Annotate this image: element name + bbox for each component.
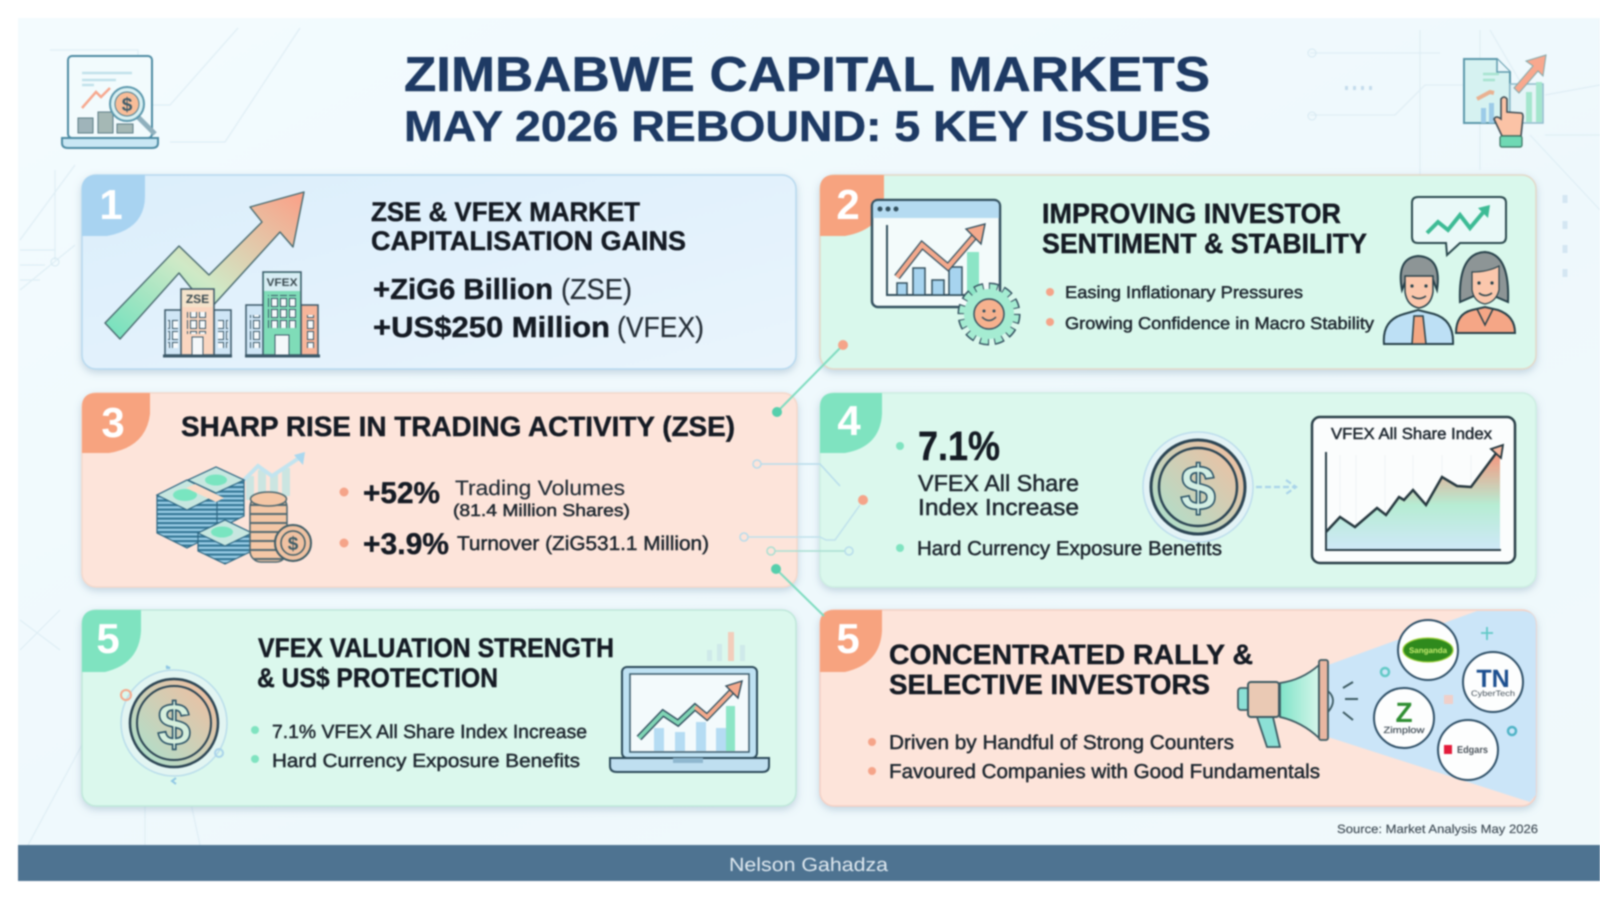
icon: VFEX building (245, 272, 320, 356)
figures: (ZSE) (561, 274, 632, 306)
company logo: TN CyberTech (1463, 652, 1523, 712)
company logo: green oval: Sanganda (1409, 646, 1448, 655)
footer bar: Nelson Gahadza (729, 855, 888, 876)
icon: dollar coin (1143, 432, 1253, 542)
number badge 4: 4 (837, 397, 861, 444)
number badge 1: 1 (99, 181, 123, 228)
arrow: coin to chart (1256, 480, 1296, 494)
stat: trading volumes (340, 477, 630, 520)
heading: VFEX VALUATION STRENGTH (258, 633, 614, 663)
figures: +ZiG6 Billion (373, 274, 553, 306)
connector circuit lines (740, 340, 868, 616)
panel 4: VFEX index increase (820, 393, 1536, 587)
stat: turnover: Turnover (ZiG531.1 Million) (457, 533, 709, 555)
company logo: Zimplow (1374, 688, 1434, 748)
heading: SENTIMENT & STABILITY (1042, 228, 1367, 259)
number badge 3: 3 (101, 399, 125, 446)
icon: male investor (1384, 256, 1453, 344)
heading (1042, 198, 1367, 259)
panel 3: trading activity (82, 393, 797, 587)
icon: rising arrow (105, 192, 304, 339)
title: ZIMBABWE CAPITAL MARKETS (404, 48, 1210, 102)
icon: female investor (1456, 252, 1515, 333)
figures (373, 274, 704, 344)
bullet list: Favoured Companies with Good Fundamentals (889, 761, 1320, 783)
stat: turnover: +3.9% (363, 528, 449, 561)
panel 5 right: concentrated rally (820, 610, 1536, 806)
number badge 5: 5 (836, 615, 860, 662)
icon: dollar coin with cycle arrows (121, 666, 227, 784)
heading: SHARP RISE IN TRADING ACTIVITY (ZSE) (181, 411, 735, 442)
icon: money stacks and coins: $ (288, 534, 299, 555)
number badge 2 (820, 175, 884, 236)
icon: browser chart window (872, 200, 1000, 307)
panel 2: investor sentiment (820, 175, 1536, 369)
icon: megaphone (1238, 660, 1358, 747)
heading (257, 633, 614, 693)
chart: VFEX All Share Index (1312, 417, 1515, 563)
icon: speech bubble with chart (1412, 197, 1506, 255)
title: MAY 2026 REBOUND: 5 KEY ISSUES (404, 103, 1211, 151)
bullet list: 7.1% VFEX All Share Index Increase (272, 722, 587, 743)
stat: 7.1%: Index Increase (918, 494, 1079, 520)
company logo: Edgars: Edgars (1457, 745, 1488, 756)
stat: trading volumes: +52% (363, 477, 440, 510)
icon: dollar coin with cycle arrows: $ (157, 691, 191, 758)
figures: +US$250 Million (373, 312, 610, 344)
panel 1: market capitalisation gains (82, 175, 796, 369)
heading: & US$ PROTECTION (257, 663, 498, 693)
footer bar (18, 845, 1600, 881)
icon: laptop with magnifier and coins: $ (122, 95, 133, 116)
figures: (VFEX) (617, 312, 704, 344)
number badge 2: 2 (836, 181, 860, 228)
number badge 5 (82, 610, 141, 672)
heading (371, 197, 686, 256)
heading: IMPROVING INVESTOR (1042, 198, 1341, 229)
source note: Source: Market Analysis May 2026 (1337, 822, 1538, 836)
stat: 7.1%: 7.1% (918, 423, 1000, 469)
heading: SELECTIVE INVESTORS (889, 669, 1210, 700)
megaphone beam (1328, 611, 1536, 802)
icon: document chart with pointing hand (1464, 55, 1546, 147)
bullet list (251, 722, 587, 772)
bullet list (1046, 283, 1375, 333)
number badge 1 (82, 175, 145, 236)
bullet list: Driven by Handful of Strong Counters (889, 732, 1234, 754)
company logo: Zimplow: Zimplow (1384, 725, 1425, 735)
number badge 5: 5 (96, 615, 120, 662)
company logo: Edgars (1438, 720, 1498, 780)
number badge 4 (820, 393, 882, 453)
icon: money stacks and coins (157, 452, 311, 564)
heading: CAPITALISATION GAINS (371, 226, 686, 256)
decorative markers (1381, 627, 1516, 735)
stat: trading volumes: Trading Volumes (455, 477, 625, 500)
icon: dollar coin: $ (1180, 452, 1216, 524)
company logo: green oval (1398, 620, 1458, 680)
heading: CONCENTRATED RALLY & (889, 639, 1253, 670)
title (404, 48, 1211, 151)
stat: 7.1%: VFEX All Share (918, 470, 1079, 496)
company logo: Zimplow: Z (1395, 697, 1413, 728)
chart: VFEX All Share Index: VFEX All Share Index (1331, 426, 1492, 443)
heading: ZSE & VFEX MARKET (371, 197, 640, 227)
stat: 7.1% (896, 423, 1079, 520)
icon: laptop with rising chart (610, 632, 769, 772)
icon: VFEX building: VFEX (266, 277, 298, 289)
bullet: Hard Currency Exposure Benefits (917, 538, 1222, 560)
icon: smiling gear (962, 287, 1016, 341)
heading (889, 639, 1253, 700)
bullet list (868, 732, 1320, 783)
stat: trading volumes: (81.4 Million Shares) (453, 501, 630, 520)
bullet list: Hard Currency Exposure Benefits (272, 751, 580, 772)
bullet list: Growing Confidence in Macro Stability (1065, 314, 1375, 333)
company logo: TN CyberTech: TN (1476, 665, 1510, 693)
bullet list: Easing Inflationary Pressures (1065, 283, 1303, 302)
icon: ZSE building: ZSE (186, 292, 209, 306)
number badge 5 (820, 610, 882, 672)
icon: ZSE building (163, 289, 232, 356)
company logo: TN CyberTech: CyberTech (1471, 689, 1515, 698)
number badge 3 (82, 393, 150, 453)
panel 5 left: valuation strength (82, 610, 796, 806)
icon: laptop with magnifier and coins (62, 56, 158, 148)
stat: turnover (340, 528, 709, 561)
